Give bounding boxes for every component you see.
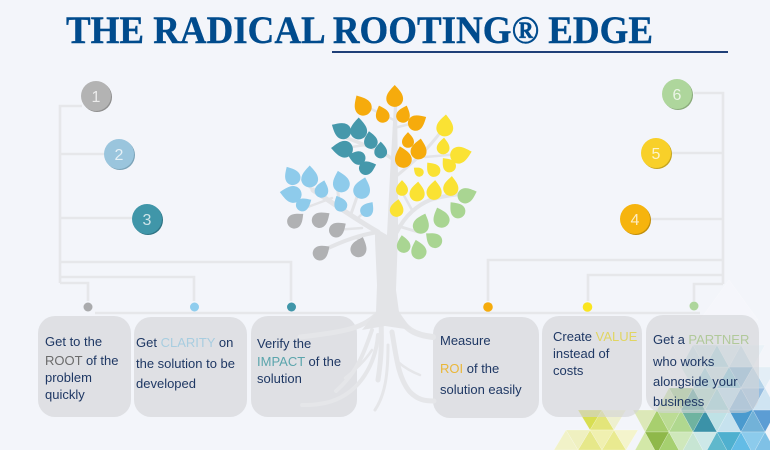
- text: create value: instead of: [553, 346, 610, 361]
- title: THE RADICAL ROOTING® EDGE: [66, 9, 653, 52]
- numbered badge 3: 3: [143, 212, 152, 229]
- numbered badge 4: 4: [631, 212, 640, 229]
- text: measure roi: ROI of the: [440, 361, 499, 376]
- numbered badge 6: [662, 79, 693, 110]
- triangle mosaic background: [554, 280, 770, 450]
- text: measure roi: Measure: [440, 333, 491, 348]
- leaves: orange cluster: [349, 85, 430, 170]
- left connector lines: [60, 106, 291, 301]
- tree trunk and branches: [302, 104, 467, 330]
- text: get a partner: alongside your: [653, 374, 738, 389]
- connector dots: [84, 302, 698, 312]
- tree roots: [300, 312, 434, 410]
- text: get a partner: Get a PARTNER: [653, 332, 749, 347]
- leaves: teal cluster: [328, 117, 387, 177]
- title underline: [332, 51, 728, 53]
- text: verify the impact: solution: [257, 371, 302, 386]
- text: create value: Create VALUE: [553, 329, 637, 344]
- right connector lines: [488, 93, 723, 301]
- numbered badge 1: [81, 81, 112, 112]
- text: get to the root: problem: [45, 370, 92, 385]
- text: get a partner: who works: [652, 354, 715, 369]
- text: get clarity: the solution to be: [136, 356, 235, 371]
- text: get to the root: ROOT of the: [45, 353, 118, 368]
- step boxes: [38, 315, 759, 418]
- numbered badge 2: 2: [115, 147, 124, 164]
- tree leaves: [278, 85, 479, 263]
- leaves: gray cluster: [284, 207, 370, 263]
- numbered badge 5: [641, 138, 672, 169]
- leaves: green cluster: [395, 184, 479, 261]
- numbered badge 1: 1: [92, 89, 101, 106]
- text: get a partner: business: [653, 394, 705, 409]
- text: get to the root: Get to the: [45, 334, 102, 349]
- text: get clarity: developed: [136, 376, 196, 391]
- numbered badge 4: [620, 204, 651, 235]
- horizontal ground line: [95, 312, 700, 314]
- leaves: yellow cluster: [389, 114, 474, 218]
- text: verify the impact: IMPACT of the: [257, 354, 341, 369]
- text: create value: costs: [553, 363, 584, 378]
- text: get clarity: Get CLARITY on: [136, 335, 233, 350]
- text: verify the impact: Verify the: [257, 336, 311, 351]
- numbered badge 5: 5: [652, 146, 661, 163]
- numbered badge 6: 6: [673, 87, 682, 104]
- leaves: light blue cluster: [278, 163, 378, 219]
- numbered badge 2: [104, 139, 135, 170]
- numbered badge 3: [132, 204, 163, 235]
- text: get to the root: quickly: [45, 387, 85, 402]
- text: measure roi: solution easily: [440, 382, 522, 397]
